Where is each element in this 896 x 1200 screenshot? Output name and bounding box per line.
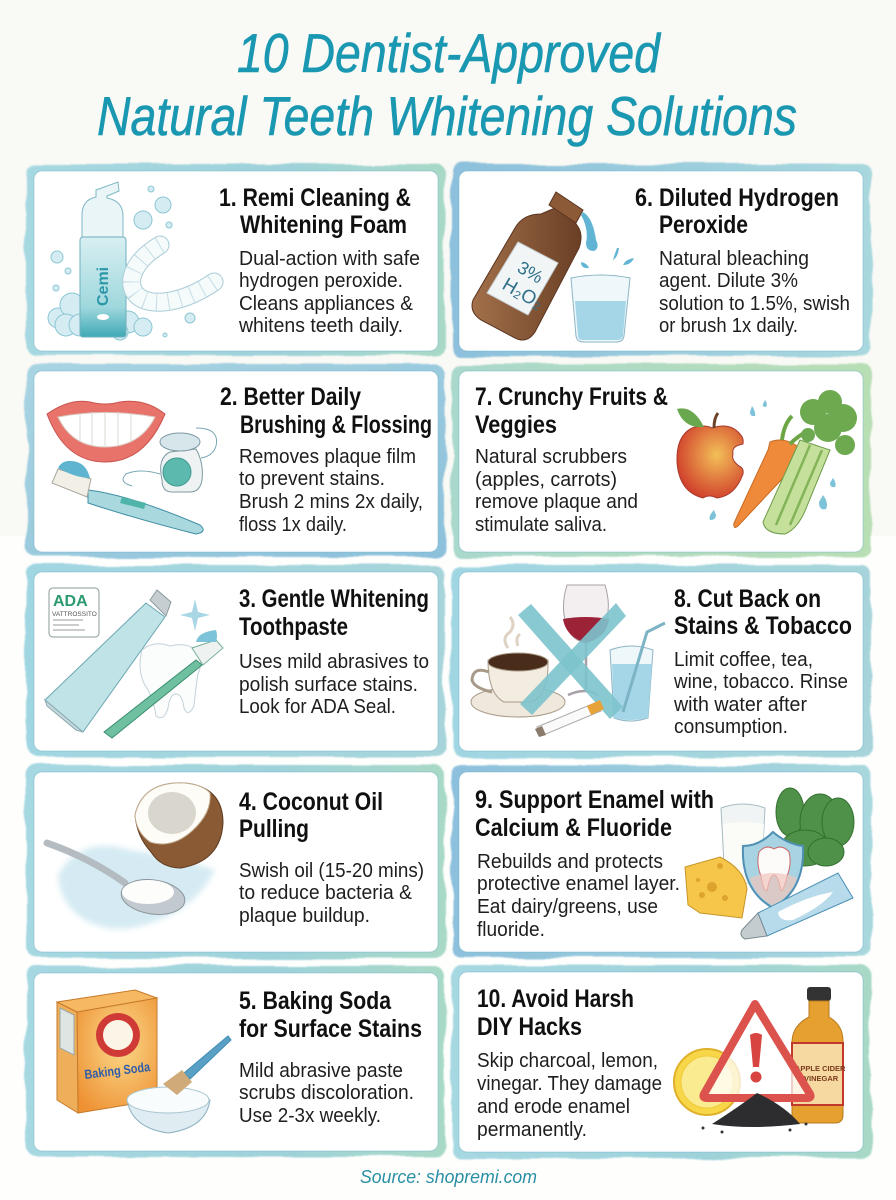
card frame 9 — [452, 765, 871, 958]
heading 3 — [239, 585, 429, 641]
heading 4: 4. Coconut Oil — [239, 788, 383, 816]
icon: baking soda box, bowl and brush — [57, 990, 231, 1133]
body text 3 — [239, 651, 429, 718]
heading 8 — [674, 585, 852, 640]
icon: smile, floss and toothbrush — [47, 401, 217, 534]
body text 1: hydrogen peroxide. — [239, 270, 403, 292]
icon: coconut and spoon — [47, 783, 223, 929]
heading 10: 10. Avoid Harsh — [477, 985, 634, 1013]
title: 10 Dentist-Approved — [237, 22, 662, 84]
body text 1: whitens teeth daily. — [238, 315, 403, 337]
panel: 9 enamel support — [452, 765, 871, 958]
body text 2: Brush 2 mins 2x daily, — [239, 491, 423, 513]
body text 6: agent. Dilute 3% — [659, 270, 798, 292]
icon: milk, greens, shield, cheese and toothpaste — [685, 788, 854, 939]
icon: peroxide bottle and glass of water: H₂O₂ — [498, 274, 546, 314]
heading 9: 9. Support Enamel with — [475, 786, 714, 814]
body text 8: Limit coffee, tea, — [674, 649, 813, 671]
body text 10 — [477, 1050, 662, 1141]
body text 4: to reduce bacteria & — [239, 882, 413, 904]
heading 10 — [477, 985, 634, 1041]
heading 2: Brushing & Flossing — [240, 411, 432, 439]
heading 2: 2. Better Daily — [220, 383, 361, 411]
heading 1: Whitening Foam — [240, 211, 407, 239]
icon: apple, carrot and celery — [677, 390, 857, 534]
icon: ADA seal, toothpaste, tooth and brush — [45, 588, 223, 738]
heading 1: 1. Remi Cleaning & — [219, 184, 411, 212]
icon: ADA seal, toothpaste, tooth and brush: ADA — [53, 593, 88, 610]
card frame 7 — [452, 364, 871, 557]
body text 6: solution to 1.5%, swish — [659, 293, 850, 315]
heading 10: DIY Hacks — [477, 1013, 582, 1041]
panel: 6 hydrogen peroxide — [452, 164, 871, 356]
heading 7 — [475, 383, 668, 439]
body text 3: Look for ADA Seal. — [239, 696, 396, 718]
body text 10: Skip charcoal, lemon, — [477, 1050, 658, 1072]
card frame 1 — [26, 164, 445, 356]
heading 3: 3. Gentle Whitening — [239, 585, 429, 613]
body text 6: or brush 1x daily. — [659, 315, 798, 337]
panel: 8 cut back on stains — [452, 565, 871, 757]
icon: foam bottle, aligner and bubbles: Cemi — [95, 267, 112, 306]
body text 5: scrubs discoloration. — [239, 1082, 414, 1104]
body text 2: Removes plaque film — [239, 446, 416, 468]
body text 2 — [239, 446, 423, 536]
body text 1: Dual-action with safe — [239, 248, 420, 270]
body text 6: Natural bleaching — [659, 248, 809, 270]
icon: ADA seal, toothpaste, tooth and brush: VATTROSSITO — [52, 611, 97, 618]
panel: 4 coconut oil pulling — [26, 765, 445, 958]
body text 8 — [673, 649, 848, 738]
heading 9: Calcium & Fluoride — [475, 814, 672, 842]
body text 1: Cleans appliances & — [239, 293, 414, 315]
body text 9: fluoride. — [477, 919, 545, 941]
heading 6: Peroxide — [659, 211, 748, 239]
card frame 10 — [452, 965, 871, 1159]
heading 5: 5. Baking Soda — [239, 987, 392, 1015]
body text 9: Rebuilds and protects — [477, 851, 663, 873]
icon: coffee, wine, water, cigarette crossed out — [471, 585, 665, 737]
heading 1 — [219, 184, 411, 239]
heading 9 — [475, 786, 714, 842]
body text 10: permanently. — [477, 1119, 587, 1141]
body text 9: Eat dairy/greens, use — [477, 896, 658, 918]
body text 5 — [239, 1060, 414, 1127]
heading 5 — [239, 987, 422, 1043]
body text 10: and erode enamel — [477, 1096, 630, 1118]
card frame 3 — [26, 565, 445, 757]
body text 7: stimulate saliva. — [475, 514, 607, 536]
icon: warning triangle, lemon, vinegar and charcoal: APPLE CIDER — [795, 1064, 846, 1073]
source line: Source: shopremi.com — [360, 1167, 537, 1187]
body text 2: to prevent stains. — [239, 468, 385, 490]
panel: 5 baking soda — [26, 966, 445, 1157]
body text 10: vinegar. They damage — [477, 1073, 662, 1095]
heading 5: for Surface Stains — [239, 1015, 422, 1043]
body text 7: Natural scrubbers — [475, 446, 627, 468]
icon: foam bottle, aligner and bubbles — [48, 182, 214, 340]
body text 3: Uses mild abrasives to — [239, 651, 429, 673]
icon: warning triangle, lemon, vinegar and charcoal: VINEGAR — [804, 1074, 839, 1083]
card frame 8 — [452, 565, 871, 757]
body text 8: consumption. — [674, 716, 788, 738]
card frame 4 — [26, 765, 445, 958]
icon: warning triangle, lemon, vinegar and charcoal — [674, 987, 846, 1134]
body text 3: polish surface stains. — [239, 674, 418, 696]
body text 2: floss 1x daily. — [239, 514, 347, 536]
body text 4: Swish oil (15-20 mins) — [239, 860, 424, 882]
heading 6 — [635, 184, 839, 239]
heading 4: Pulling — [239, 815, 309, 843]
panel: 2 brushing and flossing — [26, 364, 445, 557]
body text 4: plaque buildup. — [239, 905, 370, 927]
icon: peroxide bottle and glass of water: 3% — [514, 257, 547, 287]
body text 7 — [475, 446, 638, 536]
panel: 10 avoid harsh hacks — [452, 965, 871, 1159]
heading 3: Toothpaste — [239, 613, 348, 641]
body text 5: Mild abrasive paste — [239, 1060, 403, 1082]
body text 6 — [659, 248, 850, 337]
body text 7: remove plaque and — [475, 491, 638, 513]
body text 8: with water after — [673, 694, 807, 716]
panel: 1 Remi foam — [26, 164, 445, 356]
body text 9 — [477, 851, 680, 941]
heading 2 — [220, 383, 432, 439]
heading 4 — [239, 788, 383, 843]
body text 8: wine, tobacco. Rinse — [673, 671, 848, 693]
body text 7: (apples, carrots) — [475, 469, 617, 491]
card frame 5 — [26, 966, 445, 1157]
title — [97, 22, 797, 147]
body text 9: protective enamel layer. — [477, 873, 680, 895]
panel: 3 gentle toothpaste — [26, 565, 445, 757]
card frame 2 — [26, 364, 445, 557]
heading 7: Veggies — [475, 411, 557, 439]
body text 5: Use 2-3x weekly. — [239, 1105, 381, 1127]
icon: baking soda box, bowl and brush: Baking Soda — [84, 1059, 152, 1082]
heading 8: Stains & Tobacco — [674, 612, 852, 640]
heading 7: 7. Crunchy Fruits & — [475, 383, 668, 411]
heading 8: 8. Cut Back on — [674, 585, 821, 613]
body text 1 — [238, 248, 420, 337]
panel: 7 crunchy fruits and veggies — [452, 364, 871, 557]
heading 6: 6. Diluted Hydrogen — [635, 184, 839, 212]
icon: peroxide bottle and glass of water — [472, 192, 634, 342]
body text 4 — [239, 860, 424, 927]
card frame 6 — [452, 164, 871, 356]
